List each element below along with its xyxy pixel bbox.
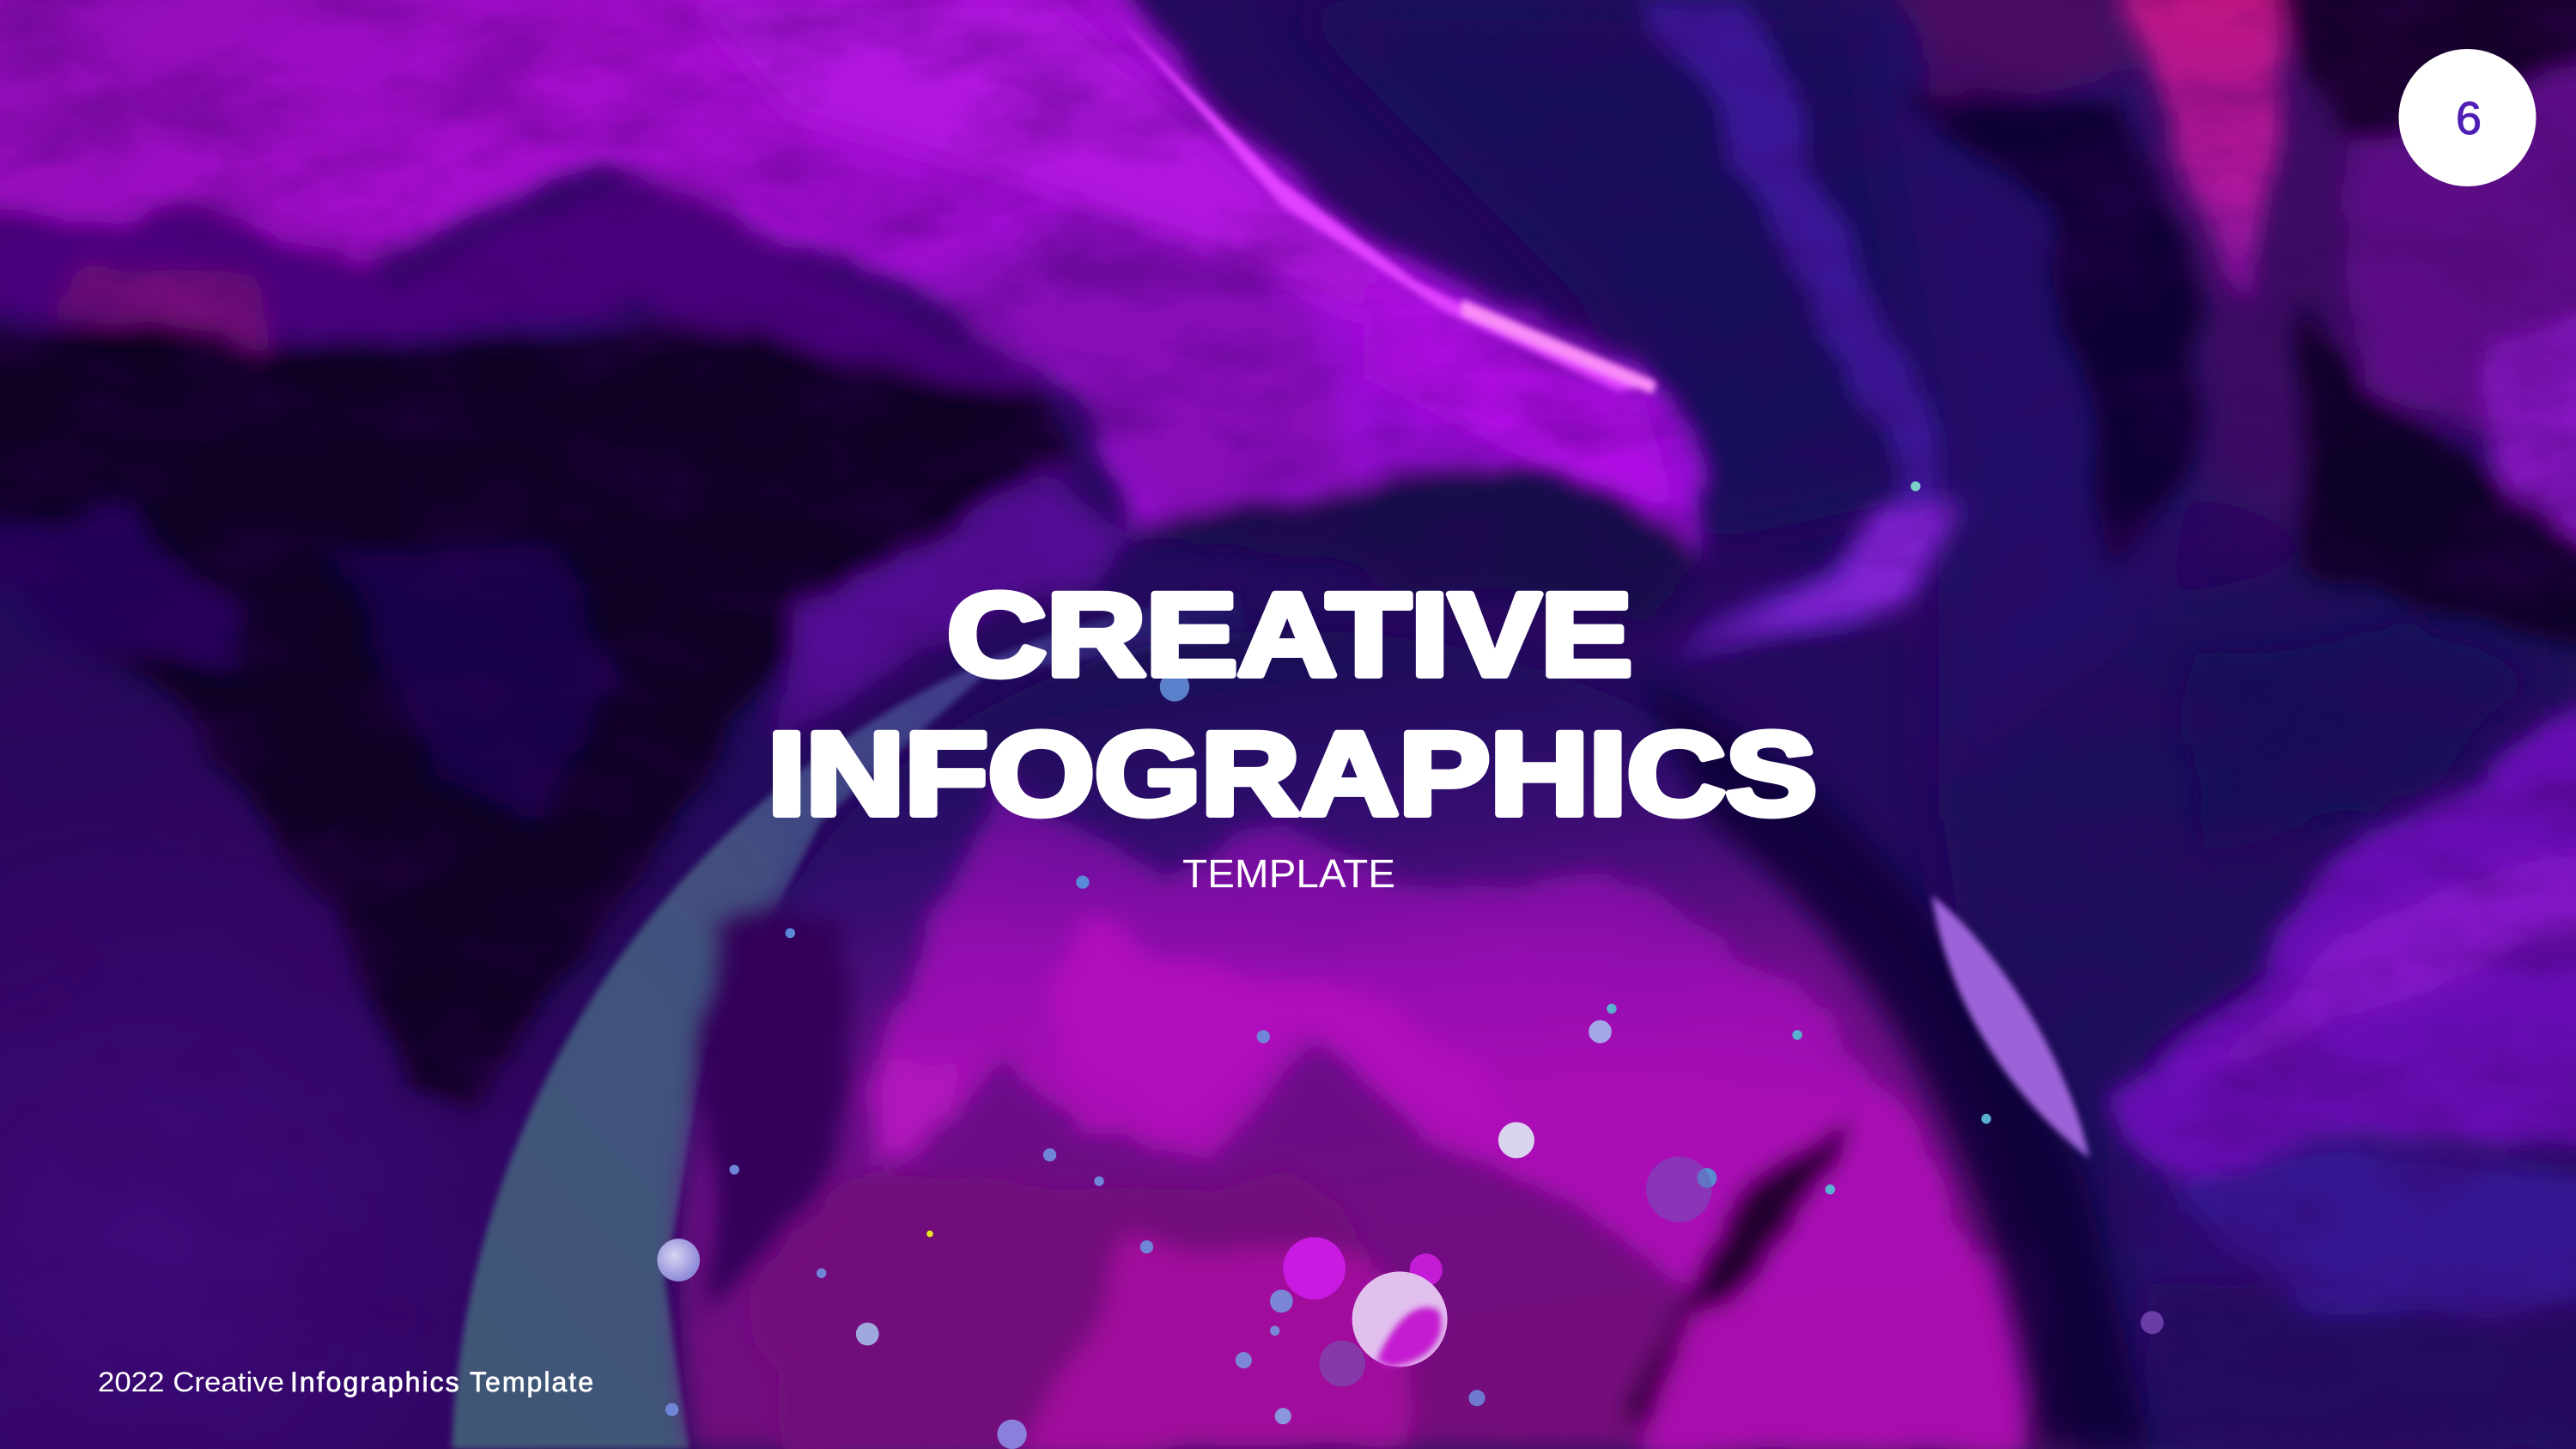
- black paint blob: [0, 320, 1076, 1109]
- bowl rim: [452, 592, 1249, 1449]
- footer text emphasis: Infographics Template: [290, 1367, 593, 1397]
- left lower purple wash: [0, 526, 854, 1449]
- bright paint streaks: [690, 0, 1963, 649]
- dark arc bounding the paint: [1643, 682, 2152, 1449]
- bowl: rim of dish and paint inside: [452, 592, 2152, 1449]
- title: [768, 569, 1817, 840]
- page number: 6: [2456, 93, 2482, 144]
- bubbles: [657, 481, 2164, 1449]
- right side deep blue paint: [1281, 0, 2576, 1449]
- title: CREATIVE: [947, 569, 1632, 701]
- lens highlight: [1932, 895, 2090, 1158]
- right streak paint: [1643, 0, 1955, 649]
- subtitle: TEMPLATE: [1182, 851, 1395, 896]
- title: INFOGRAPHICS: [768, 709, 1817, 840]
- footer text: 2022 Creative: [98, 1367, 284, 1397]
- bowl interior: [680, 630, 2078, 1449]
